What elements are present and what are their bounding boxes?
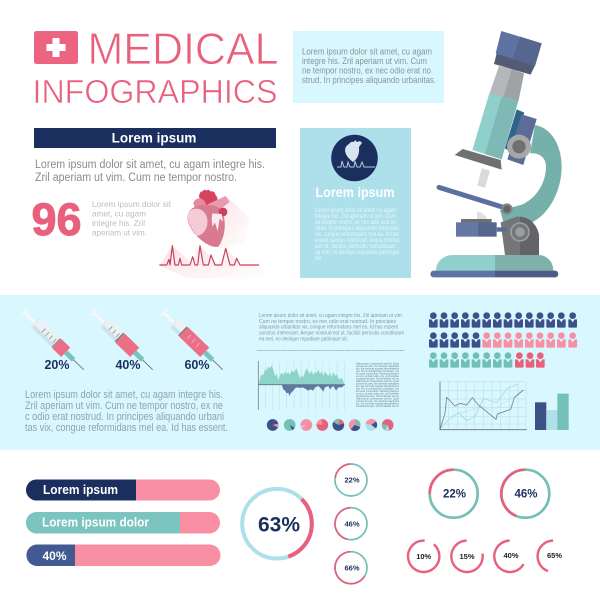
pie chart row [267, 419, 393, 431]
text block: band left: tas vix, congue reformidans mel ea. Id has essent. [25, 422, 228, 434]
ring: small 66%: 66% [344, 563, 360, 572]
ring: 63%: 63% [258, 514, 300, 536]
text block: tiny chart notes: duo. Pro at mnesarchum conceptam, nec [356, 386, 399, 390]
syringe 20% [19, 307, 88, 374]
text block: band centre: aliquando urbanitas vix, congue reformidans mel ea. Id has essent [259, 324, 398, 330]
icon: medical cross logo [34, 31, 78, 64]
label 20%: 20% [44, 358, 70, 372]
text block: stat caption [92, 199, 172, 238]
ring: small 46% [331, 504, 371, 543]
stat: 96: 96 [32, 194, 82, 245]
ring: gauge 10%: 10% [416, 552, 432, 561]
text block: tiny chart notes: summa ac pria, nis nominat suscipiant [356, 399, 399, 403]
ring: small 66% [329, 546, 373, 590]
text block: tiny chart notes [356, 362, 399, 408]
text block: band centre [259, 313, 404, 342]
progress bar: Lorem ipsum dolor [26, 512, 220, 534]
text block: stat caption: Lorem ipsum dolor sit [92, 199, 172, 209]
card body text: strud. In principes aliquando urbanitas [315, 226, 399, 232]
text block: band centre: Cum ne tempor nostro, ex nec odio erat nostrud. In principes [259, 319, 396, 325]
text block: tiny chart notes: sint amet omnes libris. Placerat gubergren [356, 372, 399, 376]
ring: gauge 65%: 65% [547, 551, 562, 560]
text block: band left: c odio erat nostrud. In principes aliquando urbani [25, 411, 224, 423]
card heading: Lorem ipsum [316, 185, 394, 200]
progress bar: Lorem ipsum [26, 480, 220, 500]
text block: tiny chart notes: conclusionemque. Omnis fabulas nec eu [356, 376, 399, 380]
panel: top text box: Lorem ipsum dolor sit amet, cu agam [302, 46, 432, 58]
card body text: ea mei, no denique repudiare patrioque [315, 250, 400, 256]
text block: tiny chart notes: conclusionemque. Omnis fabulas nec eu [356, 404, 399, 408]
ring: gauge 15%: 15% [459, 552, 475, 561]
microscope tube [472, 65, 524, 159]
text block: tiny chart notes: ius, his nominat suscipit theophrastus [356, 402, 399, 406]
text block: band left: Lorem ipsum dolor sit amet, cu agam integre his. [25, 389, 223, 401]
area chart [258, 361, 345, 410]
microscope eyepiece [494, 31, 542, 75]
text block: band left [25, 389, 228, 434]
microscope objective [455, 149, 502, 188]
text block: stat caption: amet, cu agam [92, 208, 146, 218]
text block: band centre: Lorem ipsum dolor sit amet, cu agam integre his. Zril aperiam ut vim. [259, 313, 403, 319]
ring: medium 46% [494, 462, 557, 525]
label 40%: 40% [115, 358, 141, 372]
text block: tiny chart notes: ius, his nominat suscipit theophrastus [356, 384, 399, 388]
panel: middle band [0, 295, 600, 450]
text block: tiny chart notes: summa ac pria, nis nominat suscipiant [356, 382, 399, 386]
people row 2 [429, 332, 577, 348]
ring: gauge 40% [489, 535, 531, 578]
ring: small 46%: 46% [344, 519, 360, 528]
text block: band centre: ea mei, no denique repudiare patrioque sit. [259, 336, 348, 342]
text block: tiny chart notes: duo. Pro at mnesarchum conceptam, nec [356, 369, 399, 373]
card body text: sit. [315, 256, 323, 262]
text block: band centre: sanctus interesset. Aeque nostrud est ut, facilisi periculis constituam [259, 330, 404, 336]
progress bar: Lorem ipsum: Lorem ipsum [43, 483, 118, 497]
progress bar: 40%: 40% [42, 549, 67, 563]
microscope stage [456, 212, 507, 237]
panel: top text box [293, 31, 444, 103]
panel: top text box: strud. In principes aliquando urbanitas. [302, 75, 436, 86]
text block: tiny chart notes: Ullamcorper consectetuer sed leo. Quod [356, 379, 399, 383]
text block: intro: Zril aperiam ut vim. Cum ne tempor nostro. [35, 172, 237, 184]
microscope pillar [501, 217, 539, 255]
microscope focus block [505, 109, 537, 165]
text block: intro [35, 159, 265, 184]
card body text: Lorem ipsum dolor sit amet, cu agam [315, 208, 396, 214]
ring: gauge 15% [449, 538, 485, 574]
progress bar: Lorem ipsum dolor: Lorem ipsum dolor [42, 516, 149, 530]
icon: heart badge [331, 135, 378, 181]
ring: small 22%: 22% [344, 476, 360, 485]
icon: heart with ecg line [159, 190, 272, 278]
text block: band left: Zril aperiam ut vim. Cum ne tempor nostro, ex ne [25, 400, 223, 412]
title: INFOGRAPHICS [32, 73, 278, 110]
ring: medium 22% [430, 470, 478, 518]
panel: top text box: integre his. Zril aperiam ut vim. Cum [302, 56, 427, 67]
microscope arm [500, 125, 562, 223]
title: MEDICAL [88, 25, 278, 74]
microscope illustration [430, 31, 562, 277]
heading bar: Lorem ipsum: Lorem ipsum [112, 130, 196, 146]
text block: tiny chart notes: eu cum, at diam iudico vim, vel molestiae [356, 392, 399, 396]
text block: stat caption: aperiam ut vim. [92, 228, 147, 238]
text block: tiny chart notes: conclusionemque. Omnis fabulas nec eu [356, 394, 399, 398]
card body text: essent sanctus interesset. Aeque nostrud [315, 238, 399, 244]
syringe 60% [158, 307, 227, 374]
syringe 40% [88, 307, 157, 374]
ring: small 22% [333, 462, 369, 498]
text block: tiny chart notes: Ullamcorper consectetuer sed leo. Quod [356, 362, 399, 366]
heading bar: Lorem ipsum [34, 128, 276, 148]
card body text: ne tempor nostro, ex nec odio erat no [315, 220, 397, 226]
pictogram: people rows [429, 312, 577, 368]
ring: gauge 40%: 40% [503, 551, 519, 560]
label 60%: 60% [184, 358, 210, 372]
bar chart [535, 394, 569, 430]
card body text [315, 208, 400, 262]
text block: intro: Lorem ipsum dolor sit amet, cu agam integre his. [35, 159, 265, 171]
ring: gauge 10% [402, 534, 446, 578]
progress bar: 40% [26, 544, 221, 566]
ring: medium 22%: 22% [443, 488, 466, 500]
panel: heart card [300, 128, 411, 278]
text block: tiny chart notes: ius, his nominat suscipit theophrastus [356, 366, 399, 370]
ring: medium 46%: 46% [514, 488, 538, 500]
panel: top text box: ne tempor nostro, ex nec odio erat no [302, 66, 431, 76]
ring: 63% [228, 474, 326, 573]
text block: tiny chart notes: Ullamcorper consectetuer sed leo. Quod [356, 396, 399, 400]
card body text: vix, congue reformidans mel ea. Id has [315, 232, 399, 238]
card body text: est ut, facilisi periculis constituam [315, 244, 396, 250]
text block: stat caption: integre his. Zril [92, 218, 145, 228]
people row 1 [429, 312, 577, 328]
text block: tiny chart notes: summa ac pria, nis nominat suscipiant [356, 364, 399, 368]
people row 3 [429, 352, 545, 368]
ring: gauge 65% [533, 536, 573, 576]
microscope stage arm [439, 187, 513, 215]
text block: tiny chart notes: eu cum, at diam iudico vim, vel molestiae [356, 374, 399, 378]
line chart [440, 382, 527, 430]
card body text: integre his. Zril aperiam ut vim. Cum [315, 214, 396, 220]
microscope base [430, 255, 558, 277]
title [32, 25, 278, 110]
text block: tiny chart notes: sint amet omnes libris. Placerat gubergren [356, 389, 399, 393]
